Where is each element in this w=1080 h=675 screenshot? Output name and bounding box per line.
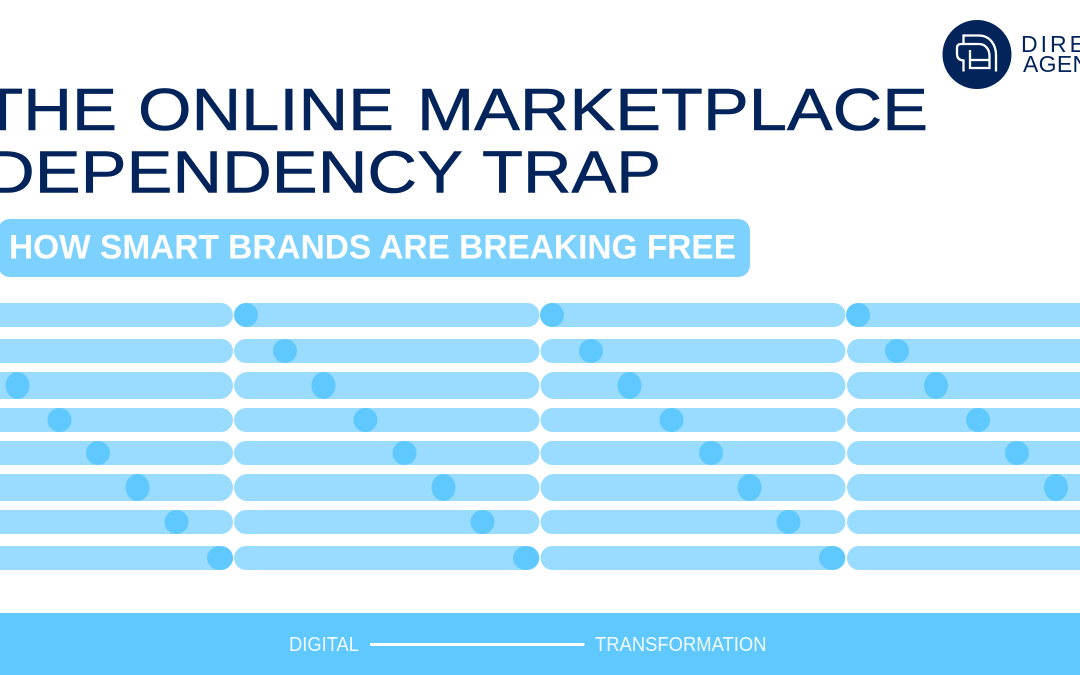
footer label: digital: DIGITAL (289, 634, 359, 656)
logo badge (942, 20, 1012, 89)
progress bars pattern (0, 303, 1080, 570)
subtitle banner: HOW SMART BRANDS ARE BREAKING FREE (9, 228, 736, 266)
footer label: transformation: TRANSFORMATION (595, 634, 766, 656)
logo wordmark (1021, 31, 1080, 77)
subtitle banner (0, 219, 750, 277)
footer band (0, 613, 1080, 675)
logo (942, 20, 1080, 89)
title: MARKETPLACE (417, 77, 928, 143)
title (0, 77, 928, 206)
footer connector line (370, 643, 584, 646)
title: TRAP (482, 140, 661, 206)
title: ONLINE (138, 77, 394, 143)
